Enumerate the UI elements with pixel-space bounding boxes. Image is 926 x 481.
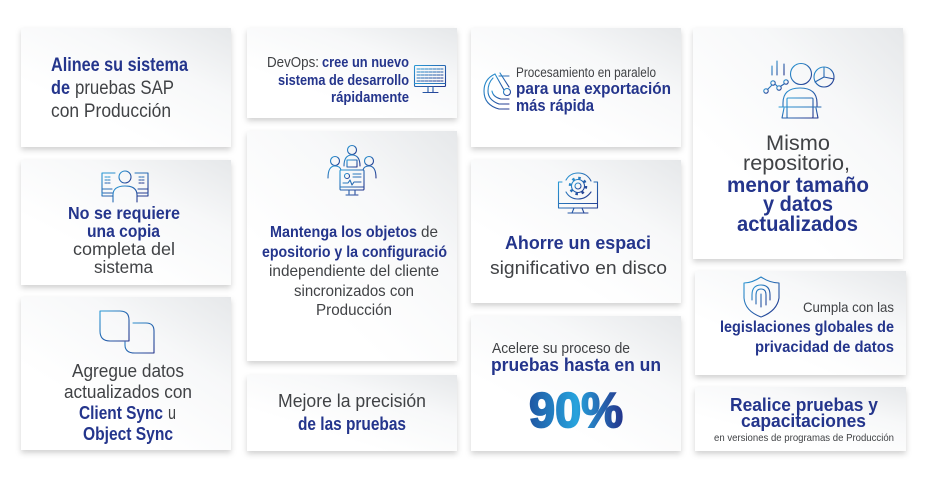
panel: save disk space xyxy=(471,160,681,303)
text: tests and training: capacitaciones xyxy=(741,411,866,431)
text: speed up testing xyxy=(491,341,661,375)
panel: no full copy required xyxy=(21,160,231,285)
panel: parallel processing: para una exportación xyxy=(516,80,671,98)
text: improve accuracy: Mejore la precisión xyxy=(278,391,426,411)
text: no full copy required xyxy=(68,203,180,277)
heading: align test system: de xyxy=(51,78,70,99)
text: speed up testing: pruebas hasta en un xyxy=(491,355,661,375)
text: tests and training xyxy=(714,395,894,444)
text: devops xyxy=(267,55,409,106)
text: speed up testing: Acelere su proceso de xyxy=(492,341,630,357)
text: same repository: repositorio, xyxy=(743,152,850,175)
text: same repository: y datos xyxy=(763,193,833,216)
text: privacy legislation: legislaciones globales de xyxy=(720,319,894,336)
statistic: 90%: 90% xyxy=(529,384,623,438)
text: devops: rápidamente xyxy=(331,90,409,106)
panel: devops xyxy=(247,28,457,118)
text: no full copy required: No se requiere xyxy=(68,203,180,223)
text: same repository: actualizados xyxy=(737,213,858,236)
panel: parallel processing: más rápida xyxy=(516,97,595,115)
text: add updated data: actualizados con xyxy=(64,382,192,402)
text: add updated data: Object Sync xyxy=(83,424,173,444)
heading: align test system: pruebas SAP xyxy=(75,78,174,99)
text: keep objects in sync: sincronizados con xyxy=(294,283,414,300)
text: same repository xyxy=(727,132,869,236)
icon: speed gauge xyxy=(484,73,510,109)
panel: same repository xyxy=(693,28,903,259)
text: devops: sistema de desarrollo xyxy=(278,73,409,89)
text: add updated data xyxy=(64,361,192,444)
text: privacy legislation: privacidad de datos xyxy=(755,339,894,356)
text: devops: cree un nuevo xyxy=(322,55,409,71)
heading: align test system: con Producción xyxy=(51,101,171,122)
icon: overlapping squares xyxy=(100,311,154,353)
text: same repository: menor tamaño xyxy=(727,174,869,197)
text: improve accuracy: de las pruebas xyxy=(298,414,406,434)
text: no full copy required: una copia xyxy=(87,221,160,241)
text: keep objects in sync: Producción xyxy=(316,302,392,319)
panel: align test system xyxy=(21,28,231,147)
text: parallel processing: Procesamiento en paralelo xyxy=(516,65,656,80)
icon: fingerprint shield xyxy=(744,277,779,317)
icon: team around a dashboard xyxy=(328,146,376,195)
text: save disk space: Ahorre un espaci xyxy=(505,233,651,253)
panel: add updated data xyxy=(21,297,231,450)
panel: speed up testing 90% xyxy=(471,316,681,451)
text: tests and training: Realice pruebas y xyxy=(730,395,878,415)
panel: parallel processing xyxy=(471,28,681,147)
text: add updated data: u xyxy=(168,403,176,423)
panel: keep objects in sync xyxy=(247,131,457,361)
text: privacy legislation: Cumpla con las xyxy=(803,299,894,315)
panel: tests and training xyxy=(695,387,906,451)
text: tests and training: en versiones de programas de Producción xyxy=(714,432,894,444)
text: keep objects in sync: de xyxy=(421,224,438,241)
text: no full copy required: sistema xyxy=(94,257,153,277)
icon: person at monitor xyxy=(102,171,148,202)
text: improve accuracy xyxy=(278,391,426,434)
icon: code monitor xyxy=(414,66,446,92)
text: same repository: Mismo xyxy=(766,132,830,155)
heading: align test system xyxy=(51,55,188,122)
text: keep objects in sync: Mantenga los objetos xyxy=(270,224,417,241)
panel: privacy legislation xyxy=(695,271,906,375)
text: no full copy required: completa del xyxy=(73,239,175,259)
text: add updated data: Agregue datos xyxy=(72,361,184,381)
text: keep objects in sync xyxy=(262,224,447,319)
text: add updated data: Client Sync xyxy=(79,403,163,423)
icon: gear monitor xyxy=(558,173,598,213)
text: devops: DevOps: xyxy=(267,55,319,71)
heading: align test system: Alinee su sistema xyxy=(51,55,188,76)
text: keep objects in sync: independiente del cliente xyxy=(269,263,439,280)
text: keep objects in sync: epositorio y la configuració xyxy=(262,244,447,261)
panel: improve accuracy xyxy=(247,375,457,451)
text: privacy legislation xyxy=(720,299,894,356)
icon: person with laptop and charts xyxy=(764,61,834,118)
panel: save disk space: significativo en disco xyxy=(490,258,667,278)
